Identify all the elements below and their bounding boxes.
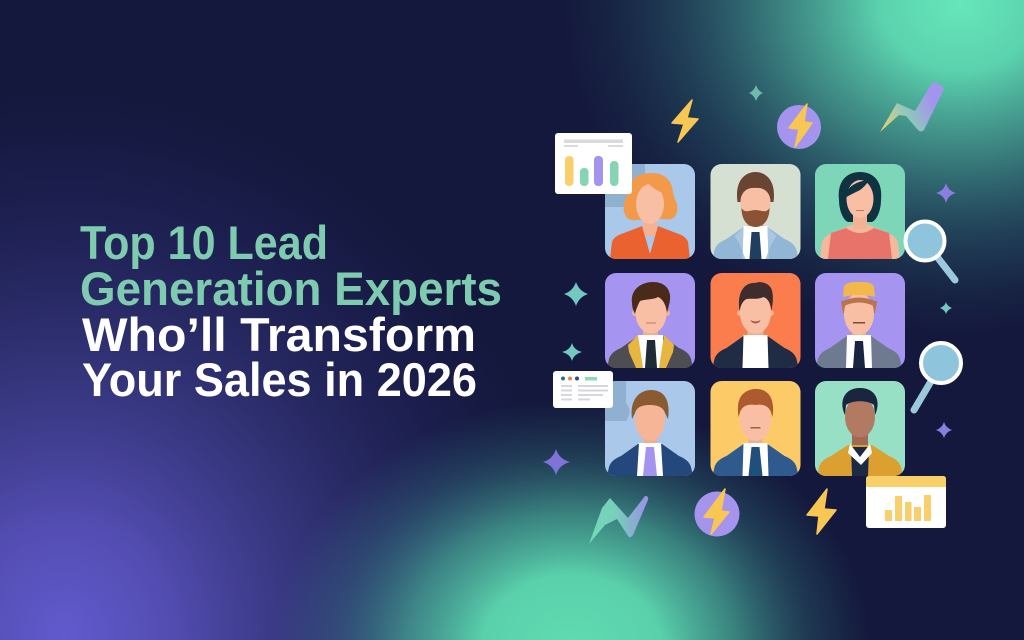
chart card: yellow header bar chart: [866, 476, 946, 528]
icon: lightning bolt bottom: [807, 489, 836, 534]
browser card: [553, 371, 613, 408]
portrait: bearded man in blue suit: [710, 164, 802, 259]
portrait: man in yellow hat: [815, 273, 905, 368]
icon: magnifier upper: [906, 222, 955, 280]
title: Your Sales in 2026: [82, 353, 477, 406]
icon: sparkle purple lower left: [543, 449, 570, 475]
title: [80, 216, 502, 406]
icon: sparkle purple lower right: [936, 422, 952, 438]
title: Top 10 Lead: [80, 216, 328, 269]
icon: lightning badge top: [777, 104, 821, 149]
icon: swoosh top right: [880, 83, 944, 132]
chart card: white bar chart: [555, 133, 632, 194]
title: Generation Experts: [80, 262, 502, 315]
icon: swoosh bottom: [589, 496, 648, 544]
icon: lightning badge bottom: [694, 489, 740, 536]
icon: lightning bolt top: [672, 100, 698, 142]
icon: sparkle teal left upper: [564, 282, 588, 306]
title: Who’ll Transform: [82, 308, 476, 361]
portrait: woman with orange hair: [605, 164, 695, 259]
icon: sparkle purple right: [936, 183, 956, 203]
portrait: man with lilac tie: [605, 381, 695, 476]
portrait: man with gold lapels: [605, 273, 695, 368]
portrait: man in mustard jacket: [815, 381, 905, 476]
icon: sparkle teal left lower: [562, 343, 582, 361]
portrait: man on orange background: [710, 273, 802, 368]
icon: sparkle top center: [749, 85, 763, 101]
portrait: woman with dark hair: [815, 164, 905, 259]
icon: magnifier lower: [914, 343, 961, 410]
icon: sparkle teal right: [940, 302, 952, 314]
portrait: man on yellow background: [710, 381, 802, 476]
